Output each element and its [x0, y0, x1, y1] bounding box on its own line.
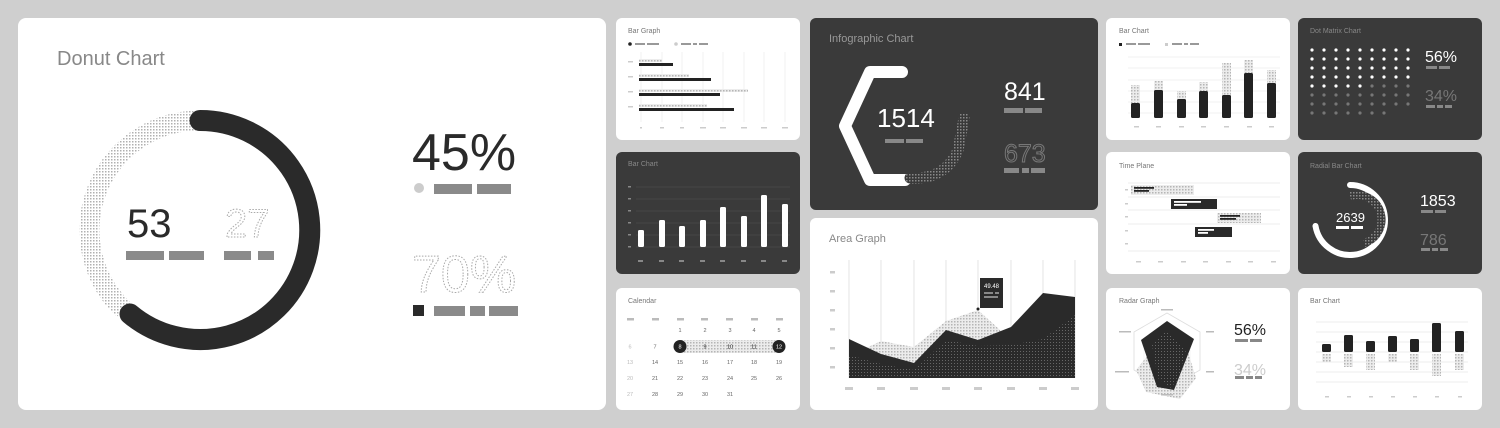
- stat 34%: 34%: [1425, 88, 1457, 105]
- legend: [628, 42, 708, 46]
- dates: 15: [677, 360, 683, 366]
- stat 34%: 34%: [1234, 362, 1266, 379]
- dates: 30: [702, 392, 708, 398]
- value 1514: 1514: [877, 103, 935, 133]
- dates: [627, 328, 782, 398]
- bars: [638, 195, 788, 247]
- heading: Bar Chart: [1310, 298, 1340, 305]
- heading: Radar Graph: [1119, 298, 1160, 305]
- area series: [849, 293, 1075, 378]
- radial arcs: [1316, 185, 1385, 255]
- value 53: 53: [127, 202, 172, 246]
- dates: 10: [727, 344, 733, 350]
- dates: 21: [652, 376, 658, 382]
- hexagon arc white: [845, 72, 905, 180]
- dates: 28: [652, 392, 658, 398]
- heading: Infographic Chart: [829, 33, 913, 45]
- stat 56%: 56%: [1425, 49, 1457, 66]
- dates: 19: [776, 360, 782, 366]
- panel: bar chart bottom: [1298, 288, 1482, 410]
- heading: Bar Graph: [628, 28, 660, 35]
- value 1853: 1853: [1420, 193, 1456, 210]
- dates: 1: [678, 328, 682, 334]
- value 27: 27: [225, 202, 270, 246]
- value 53: [126, 202, 204, 260]
- dates: 6: [628, 344, 632, 350]
- stat 70%: 70%: [412, 246, 516, 304]
- dates: 8: [678, 344, 682, 350]
- panel: dot matrix chart: [1298, 18, 1482, 140]
- dates: 2: [703, 328, 707, 334]
- value 673: 673: [1004, 140, 1046, 168]
- panel: radar graph: [1106, 288, 1290, 410]
- panel: time plane: [1106, 152, 1290, 274]
- value 27: [224, 202, 274, 260]
- heading: Dot Matrix Chart: [1310, 28, 1361, 35]
- dates: 26: [776, 376, 782, 382]
- dates: 17: [727, 360, 733, 366]
- legend: [1119, 43, 1199, 46]
- dates: 16: [702, 360, 708, 366]
- dot grid: [1310, 48, 1410, 88]
- dates: 12: [776, 344, 782, 350]
- panel: calendar: [616, 288, 800, 410]
- dates: 9: [703, 344, 707, 350]
- panel: bar chart top: [1106, 18, 1290, 140]
- bars: [1131, 60, 1276, 128]
- date range highlight: [674, 340, 786, 353]
- dates: 7: [653, 344, 657, 350]
- heading: Bar Chart: [628, 161, 658, 168]
- dates: 25: [751, 376, 757, 382]
- heading: Calendar: [628, 298, 657, 305]
- timeline bars: [1131, 185, 1261, 237]
- heading: Area Graph: [829, 233, 886, 245]
- dates: 23: [702, 376, 708, 382]
- bars: [1322, 323, 1464, 376]
- bars: [628, 59, 788, 128]
- dates: 22: [677, 376, 683, 382]
- panel: infographic chart: [810, 18, 1098, 210]
- panel: bar chart dark: [616, 152, 800, 274]
- dates: 13: [627, 360, 633, 366]
- stat 45%: 45%: [412, 124, 516, 182]
- dates: 3: [728, 328, 732, 334]
- dates: 4: [752, 328, 756, 334]
- dates: 24: [727, 376, 733, 382]
- value 841: 841: [1004, 78, 1046, 106]
- panel: bar graph: [616, 18, 800, 140]
- radar chart: [1115, 309, 1214, 399]
- dates: 11: [751, 344, 757, 350]
- heading: donut chart: Donut Chart: [57, 48, 165, 70]
- hatched arc: [910, 118, 964, 178]
- dates: 20: [627, 376, 633, 382]
- panel: donut chart: [18, 18, 606, 410]
- dates: 29: [677, 392, 683, 398]
- tooltip: [980, 278, 1003, 308]
- panel: area graph: [810, 218, 1098, 410]
- tooltip: 49.48: [984, 284, 1000, 290]
- panel: radial bar chart: [1298, 152, 1482, 274]
- value 2639: 2639: [1336, 210, 1365, 225]
- donut ring: [89, 120, 310, 339]
- heading: Time Plane: [1119, 163, 1154, 170]
- value 786: 786: [1420, 232, 1447, 249]
- heading: Radial Bar Chart: [1310, 163, 1362, 170]
- dates: 27: [627, 392, 633, 398]
- dates: 18: [751, 360, 757, 366]
- dates: 5: [777, 328, 781, 334]
- heading: Bar Chart: [1119, 28, 1149, 35]
- dates: 14: [652, 360, 658, 366]
- dates: 31: [727, 392, 733, 398]
- stat 56%: 56%: [1234, 322, 1266, 339]
